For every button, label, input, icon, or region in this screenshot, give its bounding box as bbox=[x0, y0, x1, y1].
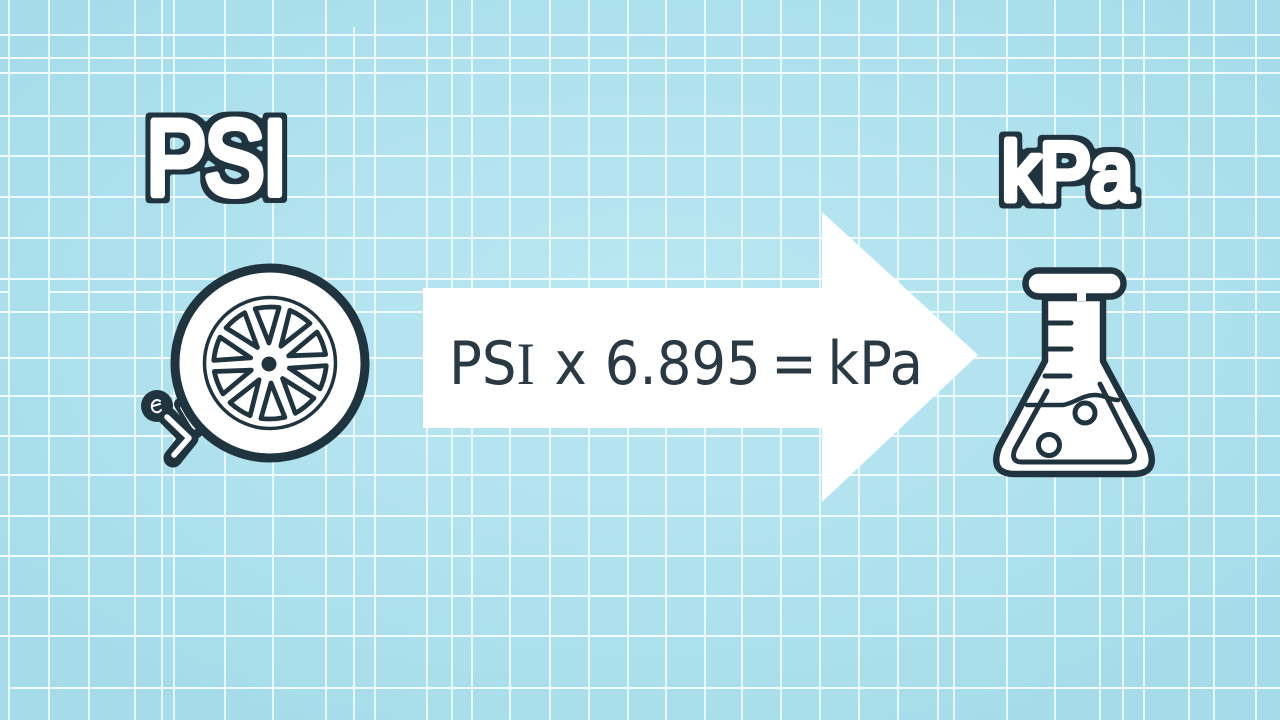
arrow with formula bbox=[423, 212, 978, 502]
valve stem bbox=[141, 390, 197, 458]
lip gap bbox=[1077, 292, 1086, 301]
bubble bbox=[1038, 434, 1060, 456]
icon: tire with valve bbox=[141, 268, 365, 458]
formula text: I bbox=[517, 332, 535, 398]
formula text: PS bbox=[449, 329, 517, 399]
hub bbox=[262, 356, 276, 372]
measure ticks bbox=[1045, 323, 1071, 376]
liquid outline bbox=[1014, 384, 1134, 462]
liquid surface bbox=[1027, 395, 1118, 405]
heading: PSI: PSI bbox=[146, 99, 285, 218]
formula text: kPa bbox=[828, 329, 923, 399]
flask body bbox=[996, 298, 1152, 474]
heading: kPa: kPa bbox=[1002, 124, 1134, 218]
bubble bbox=[1075, 403, 1095, 423]
formula text: 6.895 bbox=[605, 329, 761, 399]
icon: flask bbox=[996, 270, 1152, 474]
rim bbox=[204, 298, 336, 428]
formula text: = bbox=[771, 329, 817, 399]
flask lip bbox=[1026, 270, 1124, 296]
arrow shape bbox=[423, 212, 978, 502]
formula text: x bbox=[555, 329, 587, 399]
tire bbox=[175, 268, 365, 458]
spokes bbox=[213, 306, 327, 420]
